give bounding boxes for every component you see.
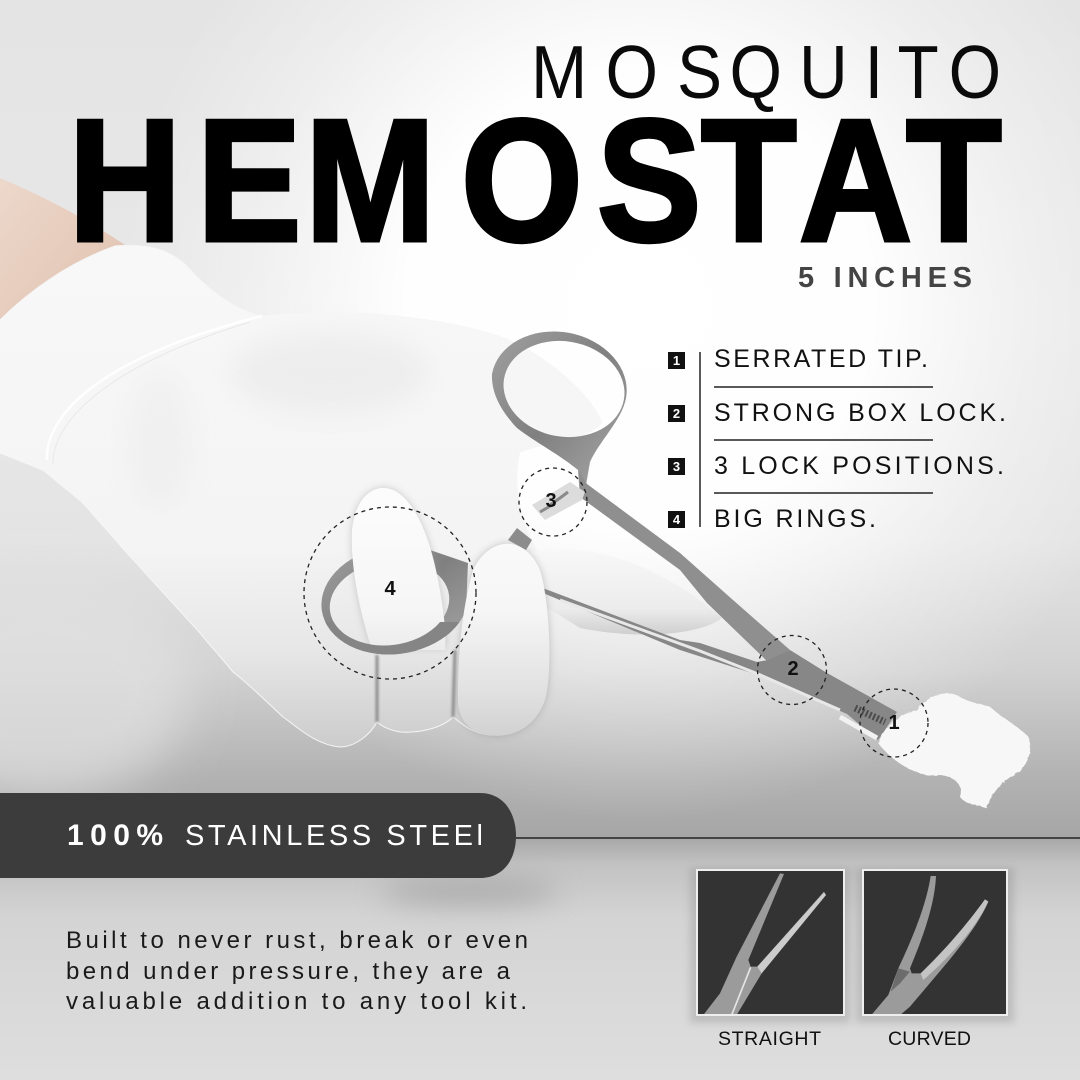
index finger: [530, 549, 722, 635]
description: valuable addition to any tool kit.: [66, 988, 527, 1015]
material banner: STAINLESS STEEl: [185, 820, 483, 852]
callout circle 1: 1: [888, 712, 900, 734]
callout circle 2: 2: [787, 658, 799, 680]
front finger: [458, 544, 549, 736]
ratchet tip: [508, 528, 532, 550]
callout circle 4: [304, 507, 476, 679]
glove body: [0, 245, 602, 747]
feature 2: STRONG BOX LOCK.: [714, 399, 1006, 427]
material banner: [0, 793, 516, 878]
gloved hand: [0, 245, 722, 747]
shaft highlight: [560, 600, 840, 710]
callout circle 4: 4: [384, 578, 396, 600]
lower shaft: [540, 587, 897, 740]
feature 4: 4: [673, 512, 681, 527]
feature list: [668, 345, 1006, 533]
feature 3: 3 LOCK POSITIONS.: [714, 452, 1004, 480]
thumbnail: curved: [856, 868, 1014, 1050]
top arm: [578, 470, 790, 662]
feature 4: BIG RINGS.: [714, 505, 876, 533]
divider line: [500, 837, 1080, 839]
title: hemostat: HEMOSTAT: [68, 84, 1002, 278]
serrated jaw: [855, 708, 885, 722]
description: Built to never rust, break or even: [66, 927, 528, 954]
description: bend under pressure, they are a: [66, 958, 511, 985]
hemostat instrument: [492, 331, 897, 740]
finger shadow: [458, 544, 549, 736]
material banner: 100%: [67, 819, 163, 852]
subtitle: length: 5 INCHES: [798, 262, 972, 294]
feature 3: 3: [673, 459, 680, 474]
cuff fold: [47, 316, 262, 460]
label: STRAIGHT: [718, 1028, 821, 1050]
feature 1: SERRATED TIP.: [714, 345, 928, 373]
feature 2: 2: [673, 406, 680, 421]
bottom finger ring: [321, 546, 468, 654]
bottom ring front arc: [325, 622, 460, 654]
top finger ring: [492, 331, 627, 485]
ratchet teeth: [532, 482, 585, 520]
callout circle 1: [860, 689, 928, 757]
finger through the ring: [352, 488, 445, 650]
icon: bare wrist: [0, 178, 125, 330]
label: CURVED: [888, 1028, 971, 1050]
thumbnail: straight: [690, 868, 850, 1050]
finger: [352, 488, 445, 650]
finger: [458, 544, 549, 736]
title: mosquito: MOSQUITO: [531, 31, 1001, 115]
callout circle 3: 3: [545, 490, 557, 512]
finger shadow: [352, 488, 445, 648]
callout circle 3: [519, 468, 587, 536]
feature 1: 1: [673, 353, 680, 368]
callout circle 2: [758, 636, 826, 704]
description: [66, 927, 528, 1015]
cotton ball: [878, 693, 1030, 808]
finger creases: [377, 650, 455, 722]
